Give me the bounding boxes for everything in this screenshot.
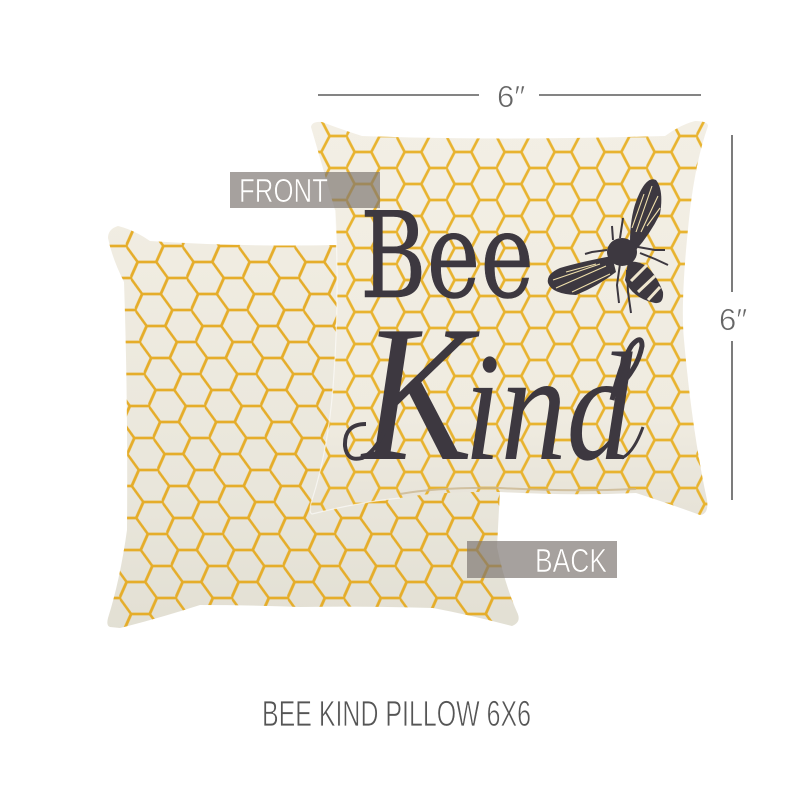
front seam bbox=[400, 488, 636, 494]
icon: bee bbox=[548, 179, 668, 313]
wing veins bbox=[553, 186, 660, 292]
pillow: front bbox=[305, 115, 715, 520]
bee legs bbox=[585, 218, 668, 313]
print: Kind: Kind bbox=[359, 287, 633, 502]
dimension: width: 6″ bbox=[497, 79, 525, 114]
bee upper wing bbox=[630, 179, 661, 250]
print: Bee: Bee bbox=[360, 188, 534, 326]
pillow: back bbox=[100, 220, 530, 635]
bee thorax bbox=[607, 238, 637, 266]
label: back bbox=[467, 541, 617, 579]
dimension: height: 6″ bbox=[719, 302, 747, 337]
label: front: FRONT bbox=[239, 172, 328, 209]
title: BEE KIND PILLOW 6X6 bbox=[262, 693, 531, 734]
bee abdomen bbox=[625, 262, 663, 303]
bee lower wing bbox=[548, 256, 616, 295]
label: back: BACK bbox=[535, 542, 607, 579]
